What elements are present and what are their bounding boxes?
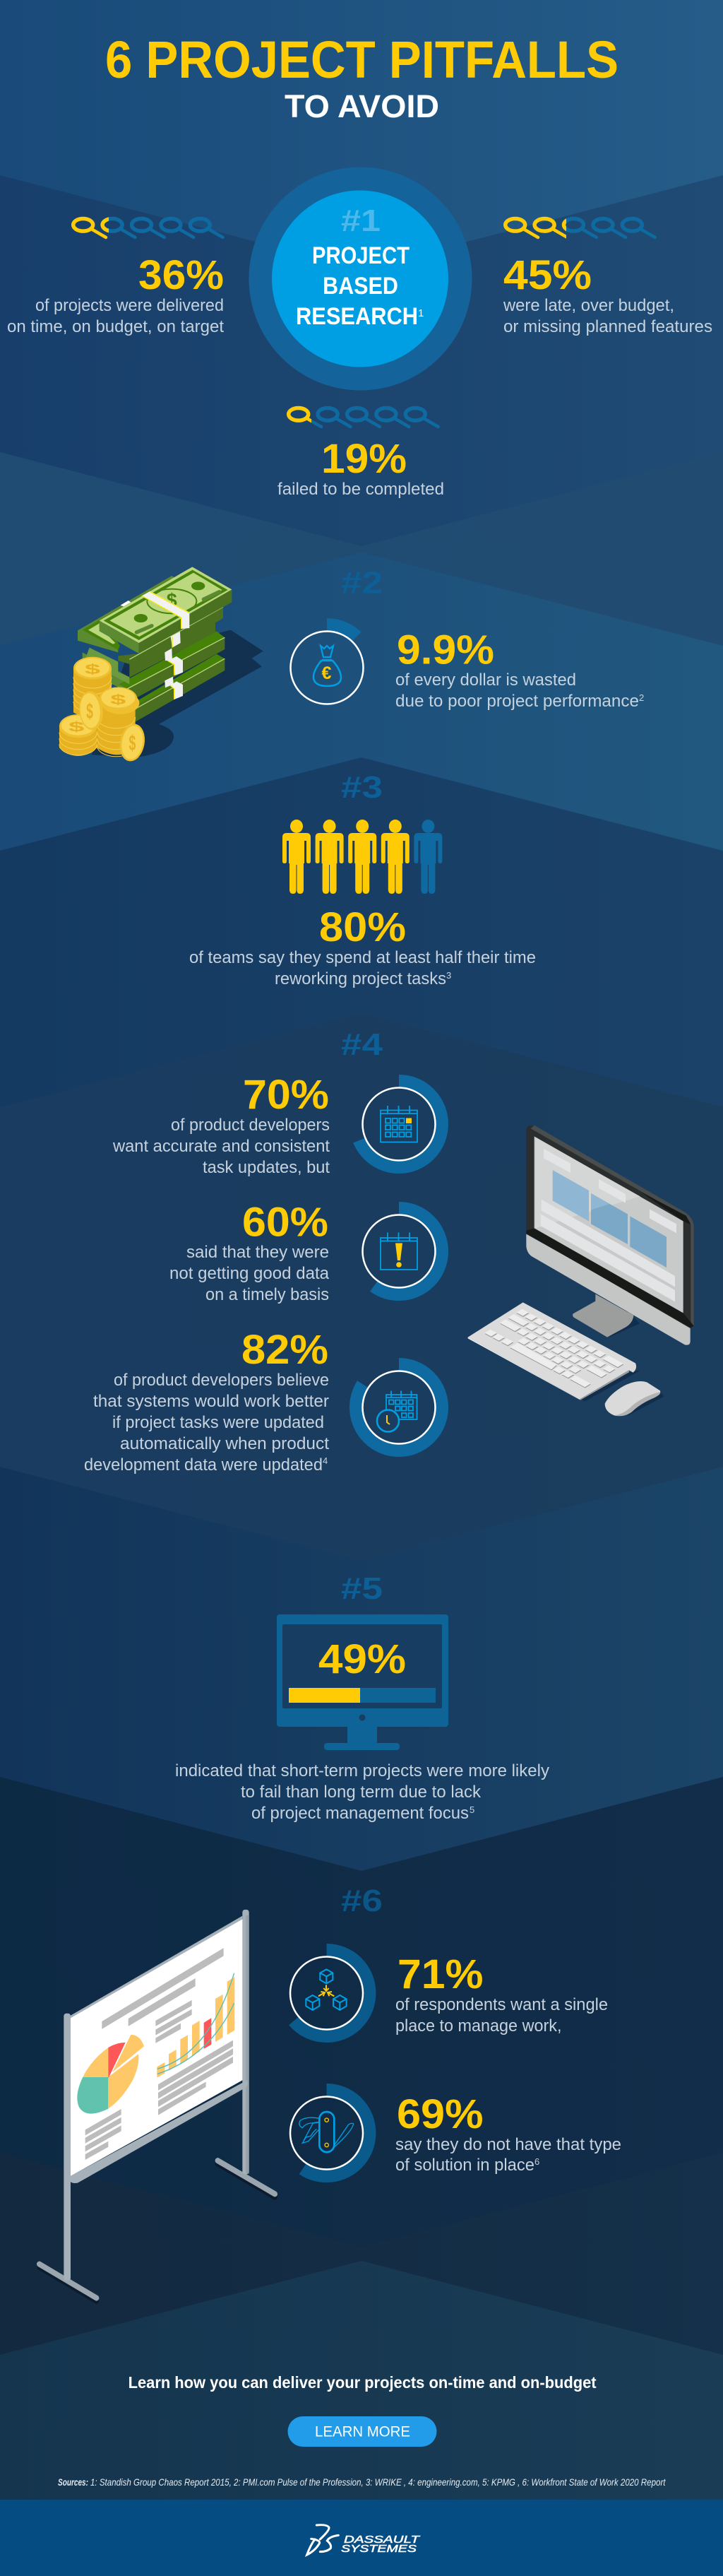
stat: 80%: 80% bbox=[319, 904, 406, 950]
text: 49% description: 5 bbox=[470, 1804, 474, 1815]
icon: monitor with 49% progress bar: 49% bbox=[318, 1636, 406, 1682]
text: 49% description: to fail than long term due to lack bbox=[241, 1783, 482, 1802]
panel: pitfall 1 circle bbox=[249, 167, 472, 390]
chart: 9.9% ring with money bag icon bbox=[284, 625, 370, 711]
button: learn more: LEARN MORE bbox=[315, 2423, 410, 2440]
stat: 69%: say they do not have that type bbox=[395, 2135, 621, 2154]
stat: 82%: 4 bbox=[323, 1455, 328, 1466]
stat: 19%: 19% bbox=[321, 436, 407, 482]
illustration: whiteboard with charts bbox=[40, 1910, 275, 2301]
stat: 69% bbox=[395, 2091, 621, 2175]
stat: 80% bbox=[189, 904, 536, 988]
stat: 60%: on a timely basis bbox=[205, 1285, 329, 1304]
heading: #6: #6 bbox=[341, 1884, 383, 1918]
stat: 80%: 3 bbox=[446, 970, 451, 981]
stat: 19% bbox=[277, 436, 444, 499]
stat: 36%: of projects were delivered bbox=[35, 296, 224, 315]
text: 49% description: of project management focus bbox=[251, 1804, 469, 1823]
stat: 71% bbox=[395, 1951, 608, 2036]
stat: 60%: said that they were bbox=[186, 1243, 329, 1262]
stat: 36% bbox=[7, 252, 224, 336]
stat: 60%: 60% bbox=[242, 1200, 328, 1245]
text: 49% description bbox=[175, 1761, 549, 1823]
logo: Dassault Systemes: SYSTEMES bbox=[341, 2543, 417, 2555]
stat: 45% bbox=[503, 252, 712, 336]
stat: 82%: 82% bbox=[241, 1327, 328, 1373]
illustration: money and coins: $ bbox=[110, 692, 126, 707]
stat: 9.9%: 9.9% bbox=[397, 627, 494, 673]
panel: pitfall 1 circle: BASED bbox=[323, 273, 398, 300]
stat: 45%: 45% bbox=[503, 252, 592, 298]
stat: 80%: of teams say they spend at least half their time bbox=[189, 948, 536, 967]
panel: pitfall 1 circle: #1 bbox=[341, 203, 381, 238]
illustration: desktop computer bbox=[468, 1125, 694, 1416]
stat: 80%: reworking project tasks bbox=[275, 969, 446, 988]
sources: Sources: bbox=[58, 2476, 88, 2488]
heading: #2: #2 bbox=[341, 565, 383, 601]
icon row: 19% magnifiers bbox=[289, 408, 438, 427]
stat: 70%: want accurate and consistent bbox=[112, 1137, 330, 1156]
chart: 71% ring with cubes icon bbox=[284, 1950, 370, 2036]
chart: 69% ring with multi-tool icon bbox=[284, 2090, 370, 2176]
stat: 9.9%: 2 bbox=[639, 692, 644, 703]
illustration: money and coins: $ bbox=[129, 731, 136, 755]
stat: 69%: 6 bbox=[534, 2156, 539, 2167]
chart: 60% ring with calendar alert icon bbox=[356, 1208, 442, 1294]
panel: pitfall 1 circle: RESEARCH bbox=[296, 303, 418, 330]
stat: 70%: of product developers bbox=[171, 1116, 330, 1135]
footer band bbox=[0, 2500, 723, 2576]
stat: 82%: automatically when product bbox=[120, 1434, 329, 1453]
title bbox=[105, 30, 619, 124]
illustration: money and coins: $ bbox=[68, 719, 84, 734]
panel: pitfall 1 circle: PROJECT bbox=[312, 242, 410, 269]
stat: 19%: failed to be completed bbox=[277, 480, 444, 499]
stat: 36%: on time, on budget, on target bbox=[7, 317, 224, 336]
icon row: 45% magnifiers bbox=[506, 219, 655, 237]
icon: monitor with 49% progress bar bbox=[277, 1614, 448, 1750]
stat: 69%: of solution in place bbox=[395, 2156, 534, 2175]
stat: 9.9%: of every dollar is wasted bbox=[395, 670, 576, 690]
heading: #4: #4 bbox=[341, 1027, 383, 1062]
icon row: 36% magnifiers bbox=[73, 219, 223, 237]
text: 49% description: indicated that short-term projects were more likely bbox=[175, 1761, 549, 1780]
stat: 36%: 36% bbox=[138, 252, 224, 298]
stat: 70%: 70% bbox=[243, 1072, 329, 1118]
stat: 82%: development data were updated bbox=[84, 1455, 323, 1475]
chart: 70% ring with calendar icon bbox=[356, 1081, 442, 1167]
stat: 60%: not getting good data bbox=[169, 1264, 330, 1283]
stat: 82%: of product developers believe bbox=[114, 1371, 329, 1390]
stat: 60% bbox=[169, 1200, 330, 1304]
logo: Dassault Systemes bbox=[307, 2525, 421, 2555]
button: learn more bbox=[288, 2416, 436, 2447]
stat: 70%: task updates, but bbox=[203, 1158, 330, 1177]
stat: 9.9% bbox=[395, 627, 644, 711]
icon row: people 4 of 5 bbox=[282, 820, 442, 894]
stat: 82%: if project tasks were updated bbox=[112, 1413, 324, 1432]
illustration: money and coins: $ bbox=[167, 589, 177, 610]
title: TO AVOID bbox=[285, 88, 439, 124]
stat: 71%: of respondents want a single bbox=[395, 1995, 608, 2014]
stat: 70% bbox=[112, 1072, 330, 1177]
stat: 71%: 71% bbox=[398, 1951, 483, 1997]
title: 6 PROJECT PITFALLS bbox=[105, 30, 619, 89]
logo: Dassault Systemes: DASSAULT bbox=[344, 2534, 421, 2546]
heading: #3: #3 bbox=[341, 770, 383, 805]
stat: 71%: place to manage work, bbox=[395, 2016, 562, 2036]
stat: 9.9%: due to poor project performance bbox=[395, 692, 639, 711]
panel: pitfall 1 circle: 1 bbox=[418, 307, 424, 319]
illustration: money and coins bbox=[59, 567, 263, 763]
stat: 82%: that systems would work better bbox=[93, 1392, 329, 1411]
illustration: money and coins: $ bbox=[85, 661, 100, 677]
stat: 45%: or missing planned features bbox=[503, 317, 712, 336]
illustration: money and coins: $ bbox=[86, 699, 93, 723]
chart: 82% ring with calendar and clock icon bbox=[356, 1364, 442, 1451]
stat: 45%: were late, over budget, bbox=[503, 296, 674, 315]
stat: 82% bbox=[84, 1327, 329, 1475]
call to action text: Learn how you can deliver your projects on-time and on-budget bbox=[129, 2373, 597, 2392]
heading: #5: #5 bbox=[341, 1571, 383, 1606]
stat: 69%: 69% bbox=[397, 2091, 483, 2137]
chart: 9.9% ring with money bag icon: € bbox=[322, 663, 332, 683]
